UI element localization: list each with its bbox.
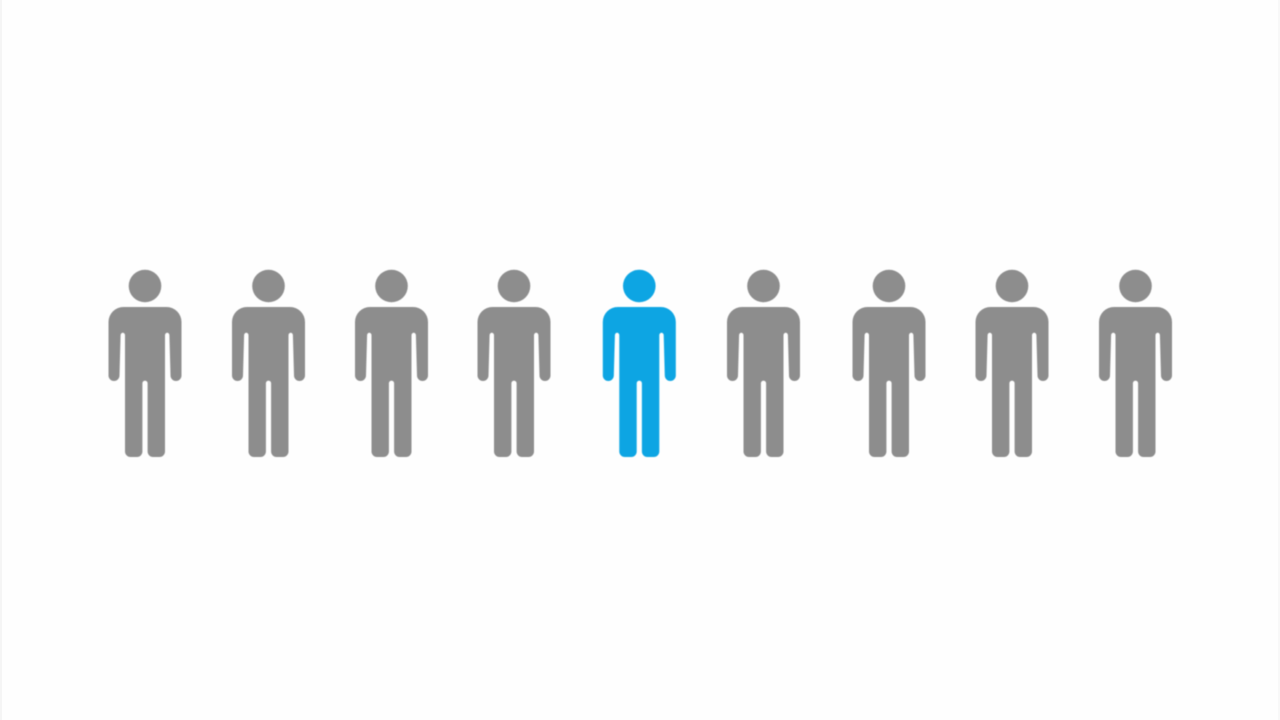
pictogram row: nine people xyxy=(108,270,1172,457)
icon: person 6 (grey) xyxy=(727,270,800,457)
icon: person 2 (grey) xyxy=(232,270,305,457)
icon: person 9 (grey) xyxy=(1099,270,1172,457)
icon: person 1 (grey) xyxy=(108,270,182,457)
icon: person 5 (highlighted blue) xyxy=(603,270,676,457)
icon: person 3 (grey) xyxy=(355,270,428,457)
icon: person 8 (grey) xyxy=(976,270,1048,457)
icon: person 7 (grey) xyxy=(852,270,926,457)
icon: person 4 (grey) xyxy=(478,270,550,457)
